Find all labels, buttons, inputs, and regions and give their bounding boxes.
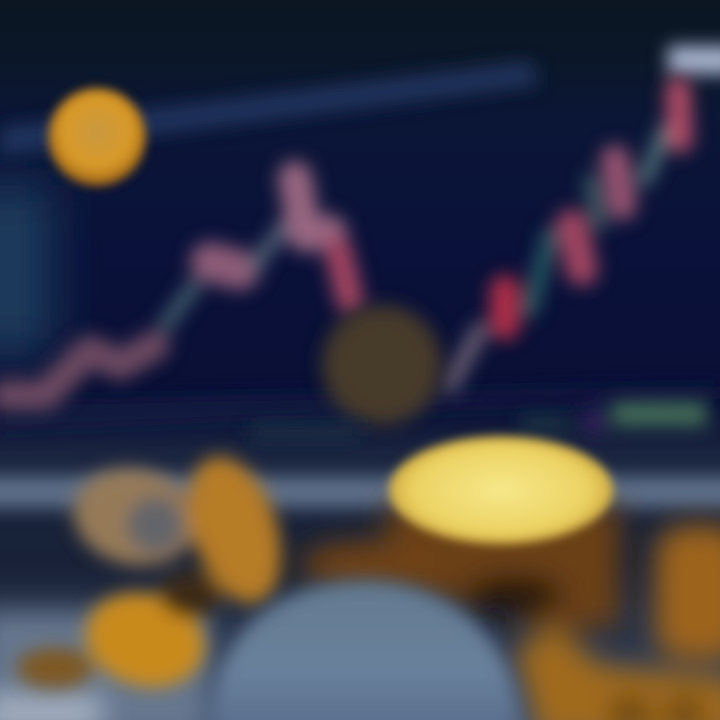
stack body (385, 505, 620, 630)
tilted pale coin (64, 457, 206, 577)
desk edge band (0, 476, 720, 508)
bronze coin, centre (322, 305, 442, 425)
left screen glow (0, 185, 50, 355)
flat coin (17, 648, 93, 688)
candlestick line: right (450, 90, 680, 385)
coin stack, left (17, 445, 298, 700)
bottom right gold coins (515, 625, 720, 720)
gold coin, upper left (48, 88, 146, 186)
upright gold coin (172, 445, 298, 615)
upper chart band (0, 46, 720, 432)
right coin (655, 525, 720, 660)
coin stack, centre right (300, 505, 720, 720)
silver coin, foreground (208, 580, 522, 720)
lower gold coin (75, 580, 215, 700)
bright top coin (389, 436, 613, 544)
shadow between coins (160, 573, 220, 617)
lower left reflection (0, 610, 210, 720)
candlestick line: left (5, 178, 350, 395)
volume bars, lower right (250, 402, 707, 438)
